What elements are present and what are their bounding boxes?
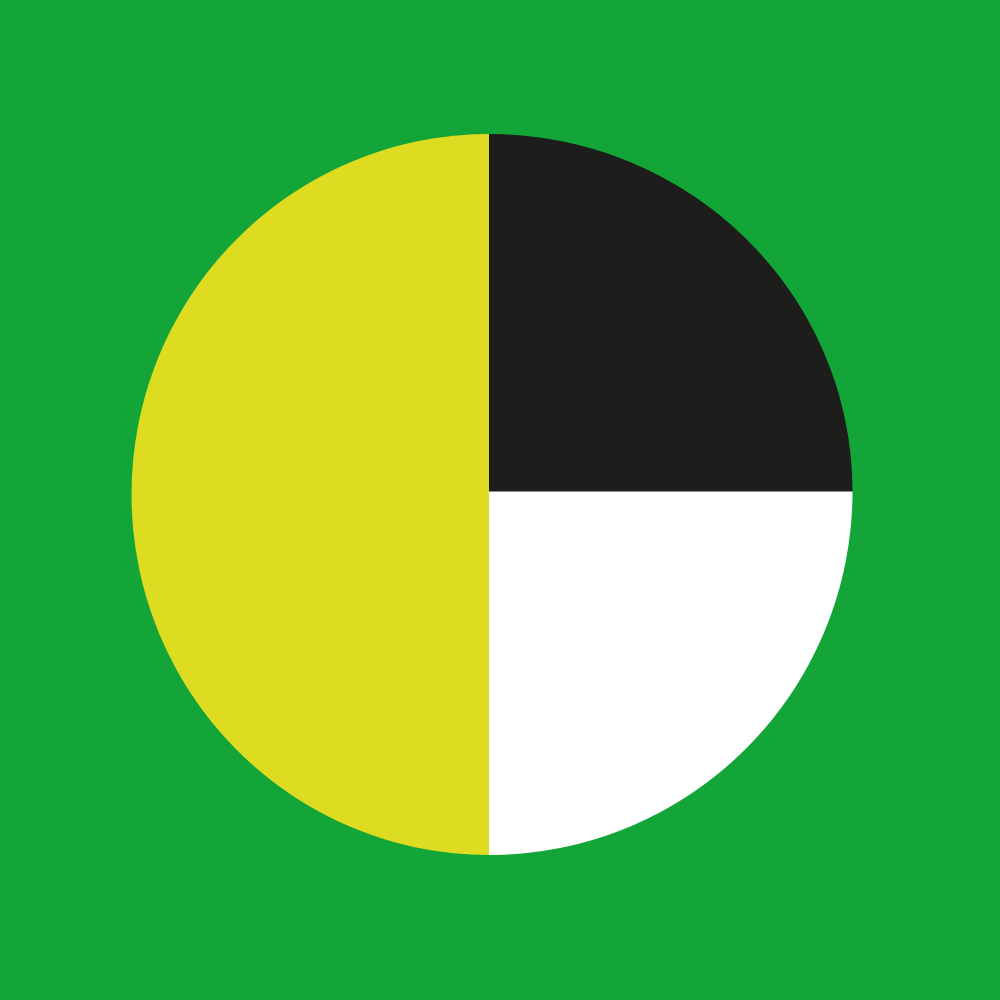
pie slice: white quarter bbox=[489, 492, 852, 855]
pie slice: yellow half bbox=[132, 134, 489, 855]
pie slice: black quarter bbox=[489, 134, 852, 492]
